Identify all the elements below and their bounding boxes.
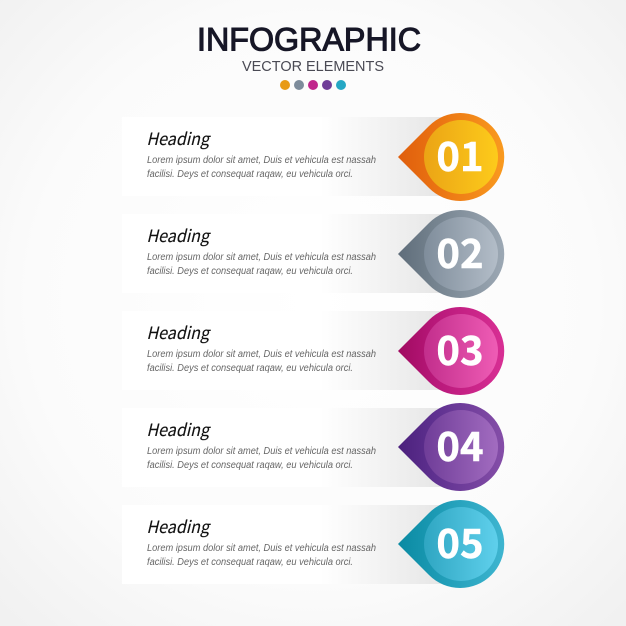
panel: step 02	[122, 210, 504, 298]
panel: step 01	[122, 113, 504, 201]
inner circle 03	[424, 314, 498, 388]
body text 04: facilisi. Deys et consequat raqaw, eu vehicula orci.	[147, 460, 353, 471]
body text 05: facilisi. Deys et consequat raqaw, eu vehicula orci.	[147, 557, 353, 568]
pin 03	[398, 307, 504, 395]
number 03: 03	[436, 319, 484, 377]
card 03	[122, 311, 442, 390]
inner circle 01	[424, 120, 498, 194]
colour dots	[280, 80, 346, 90]
body text 04	[147, 446, 376, 471]
card 01	[122, 117, 442, 196]
pin 05	[398, 500, 504, 588]
inner circle 04	[424, 410, 498, 484]
number 04: 04	[436, 415, 484, 473]
body text 02	[147, 252, 376, 277]
body text 03: facilisi. Deys et consequat raqaw, eu vehicula orci.	[147, 363, 353, 374]
heading 02: Heading	[146, 222, 211, 247]
body text 05: Lorem ipsum dolor sit amet, Duis et vehicula est nassah	[147, 543, 376, 554]
body text 02: facilisi. Deys et consequat raqaw, eu vehicula orci.	[147, 266, 353, 277]
body text 02: Lorem ipsum dolor sit amet, Duis et vehicula est nassah	[147, 252, 376, 263]
body text 01: facilisi. Deys et consequat raqaw, eu vehicula orci.	[147, 169, 353, 180]
card 04	[122, 408, 442, 487]
number 05: 05	[436, 512, 484, 570]
heading 03: Heading	[146, 319, 211, 344]
body text 03: Lorem ipsum dolor sit amet, Duis et vehicula est nassah	[147, 349, 376, 360]
pin 01	[398, 113, 504, 201]
panel: step 03	[122, 307, 504, 395]
body text 01	[147, 155, 376, 180]
inner circle 05	[424, 507, 498, 581]
panel: step 05	[122, 500, 504, 588]
panel: step 04	[122, 403, 504, 491]
card 05	[122, 505, 442, 584]
number 02: 02	[436, 222, 484, 280]
title: INFOGRAPHIC	[197, 22, 421, 58]
body text 04: Lorem ipsum dolor sit amet, Duis et vehicula est nassah	[147, 446, 376, 457]
subtitle: VECTOR ELEMENTS	[242, 58, 384, 75]
body text 03	[147, 349, 376, 374]
pin 04	[398, 403, 504, 491]
body text 05	[147, 543, 376, 568]
heading 04: Heading	[146, 416, 211, 441]
pin 02	[398, 210, 504, 298]
inner circle 02	[424, 217, 498, 291]
heading 01: Heading	[146, 125, 211, 150]
body text 01: Lorem ipsum dolor sit amet, Duis et vehicula est nassah	[147, 155, 376, 166]
heading 05: Heading	[146, 513, 211, 538]
number 01: 01	[436, 125, 484, 183]
card 02	[122, 214, 442, 293]
